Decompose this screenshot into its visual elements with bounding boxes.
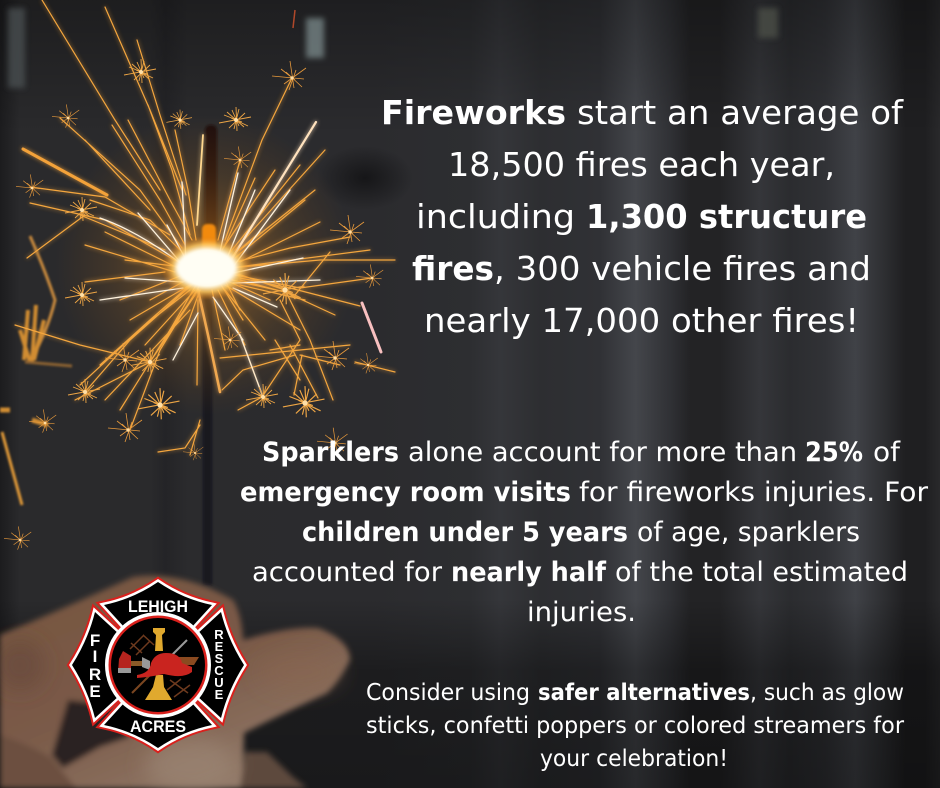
badge lettering: E: [215, 639, 224, 654]
text block: sparkler injuries: emergency room visits: [240, 477, 571, 508]
text block: safer alternatives: your celebration!: [540, 746, 728, 772]
orange ember at tip of stick: [202, 224, 216, 254]
text block: sparkler injuries: nearly half: [451, 557, 606, 588]
text block: sparkler injuries: of: [873, 437, 902, 468]
text block: fireworks statistics: 1,300 structure: [586, 197, 867, 236]
badge lettering: R: [89, 665, 101, 684]
text block: sparkler injuries: children under 5 years: [302, 517, 628, 548]
badge arms: [72, 582, 244, 748]
text block: sparkler injuries: of the total estimated: [615, 557, 908, 588]
text block: sparkler injuries: 25%: [805, 437, 863, 468]
badge lettering: I: [93, 647, 97, 666]
badge lettering: [89, 597, 224, 736]
badge lettering: LEHIGH: [128, 597, 188, 616]
text block: fireworks statistics: [381, 93, 904, 340]
white-hot core: [161, 236, 253, 300]
long rays: [15, 0, 395, 455]
logo: Lehigh Acres Fire Rescue badge: [72, 582, 244, 748]
text block: sparkler injuries: alone account for more than: [408, 437, 797, 468]
text block: safer alternatives: [366, 680, 905, 772]
spark glow: [15, 0, 395, 455]
text block: fireworks statistics: fires: [412, 249, 494, 288]
text block: sparkler injuries: injuries.: [527, 597, 636, 628]
badge lettering: E: [89, 682, 101, 701]
badge lettering: U: [214, 675, 224, 690]
text block: safer alternatives: , such as glow: [750, 680, 904, 706]
text block: sparkler injuries: Sparklers: [262, 437, 399, 468]
stray sparks: [362, 303, 381, 352]
text block: fireworks statistics: including: [416, 197, 575, 236]
text block: sparkler injuries: for fireworks injuries. For: [579, 477, 929, 508]
badge lettering: C: [214, 663, 224, 678]
motion-blurred sparks on the left: [0, 236, 72, 505]
badge center seal: [105, 612, 211, 718]
secondary star bursts: [4, 59, 383, 550]
badge lettering: R: [214, 627, 224, 642]
text block: fireworks statistics: , 300 vehicle fires and: [494, 249, 871, 288]
text block: fireworks statistics: start an average of: [577, 93, 904, 132]
hand shading: [0, 639, 342, 788]
text block: fireworks statistics: 18,500 fires each year,: [448, 145, 835, 184]
text block: sparkler injuries: [240, 437, 929, 628]
text block: safer alternatives: safer alternatives: [538, 680, 750, 706]
text block: sparkler injuries: accounted for: [252, 557, 443, 588]
text block: fireworks statistics: Fireworks: [381, 93, 566, 132]
text block: safer alternatives: Consider using: [366, 680, 530, 706]
text block: safer alternatives: sticks, confetti poppers or colored streamers for: [366, 713, 905, 739]
badge lettering: E: [215, 687, 224, 702]
sparkler stick: [203, 125, 217, 585]
text block: sparkler injuries: of age, sparklers: [637, 517, 860, 548]
text block: fireworks statistics: nearly 17,000 other fires!: [424, 301, 859, 340]
badge lettering: F: [90, 631, 100, 650]
badge lettering: ACRES: [130, 717, 186, 736]
badge lettering: S: [215, 651, 224, 666]
sparkler burst: [0, 0, 395, 550]
hand holding sparkler: [0, 576, 350, 788]
